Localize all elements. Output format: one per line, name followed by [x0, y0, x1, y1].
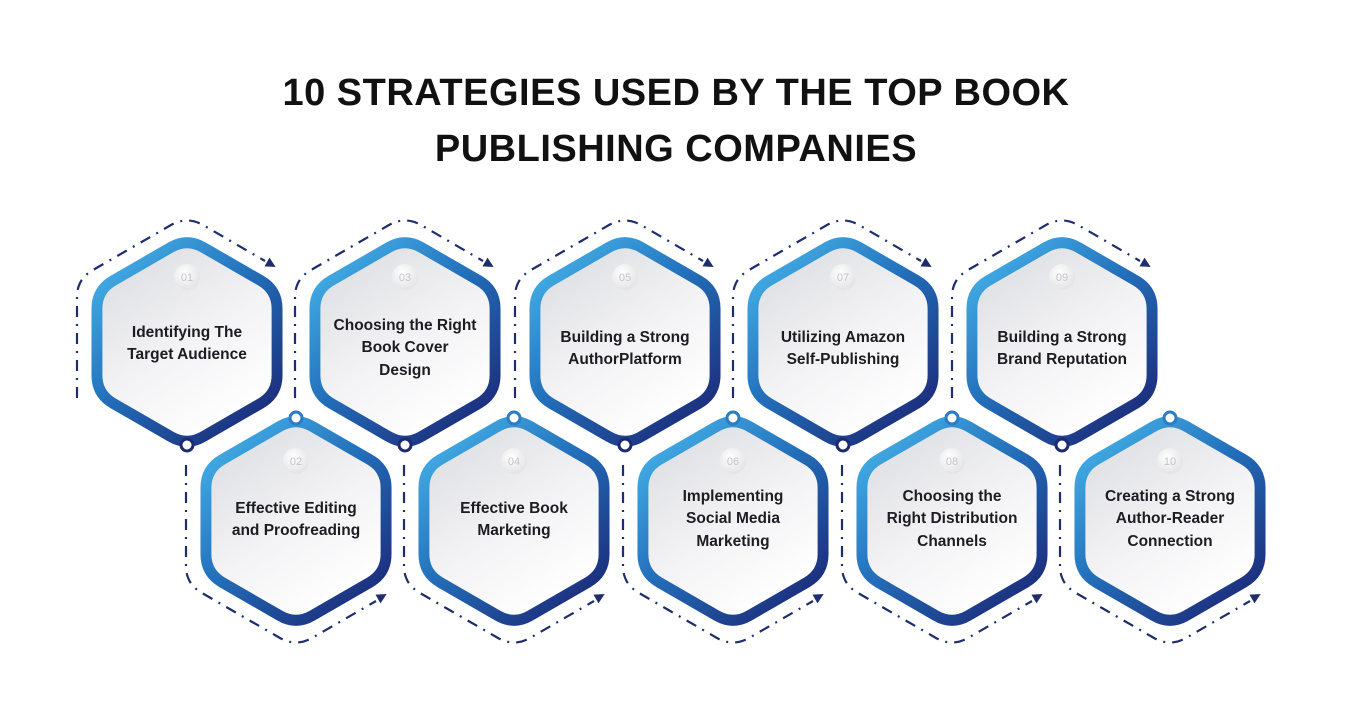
hexagon 02: 02	[290, 456, 302, 468]
hexagon 03	[295, 220, 496, 451]
hexagon 01	[77, 220, 278, 451]
hexagon 05	[515, 220, 716, 451]
hexagon 08: 08	[946, 456, 958, 468]
hexagon 04: Effective Book	[460, 500, 568, 517]
hexagon 05: Building a Strong	[560, 329, 690, 346]
hexagon 09: Building a Strong	[997, 329, 1127, 346]
hexagon 04: Marketing	[477, 522, 551, 539]
hexagon 06: 06	[727, 456, 739, 468]
hexagon 09: Brand Reputation	[997, 351, 1127, 368]
hexagon 01: 01	[181, 272, 193, 284]
hexagon 07: 07	[837, 272, 849, 284]
title: PUBLISHING COMPANIES	[435, 128, 917, 170]
hexagon 10	[1060, 412, 1263, 642]
hexagon 09: 09	[1056, 272, 1068, 284]
hexagon 01: Target Audience	[127, 346, 247, 363]
hexagon 10: 10	[1164, 456, 1176, 468]
hexagon 05: AuthorPlatform	[568, 351, 682, 368]
hexagon 03: Book Cover	[362, 339, 448, 356]
hexagon 08: Right Distribution	[887, 510, 1017, 527]
hexagon 05: 05	[619, 272, 631, 284]
hexagon 06: Implementing	[683, 488, 783, 505]
hexagon 02: and Proofreading	[232, 522, 360, 539]
title	[282, 72, 1070, 170]
hexagon 06: Social Media	[686, 510, 780, 527]
hexagon 02	[186, 412, 389, 642]
hexagon 07	[733, 220, 934, 451]
hexagon 04: 04	[508, 456, 520, 468]
hexagon 07: Self-Publishing	[787, 351, 899, 368]
hexagon 08: Channels	[917, 533, 987, 550]
hexagon 01: Identifying The	[132, 324, 242, 341]
hexagon 04	[404, 412, 607, 642]
hexagon 10: Connection	[1127, 533, 1213, 550]
hexagon 08	[842, 412, 1045, 642]
hexagon 10: Creating a Strong	[1105, 488, 1235, 505]
hexagon 06: Marketing	[696, 533, 770, 550]
hexagon 03: Choosing the Right	[334, 317, 476, 334]
hexagon 03: Design	[379, 362, 431, 379]
hexagon 02: Effective Editing	[235, 500, 357, 517]
hexagon 03: 03	[399, 272, 411, 284]
hexagon 09	[952, 220, 1153, 451]
title: 10 STRATEGIES USED BY THE TOP BOOK	[282, 72, 1070, 114]
hexagon 10: Author-Reader	[1116, 510, 1224, 527]
hexagon 07: Utilizing Amazon	[781, 329, 905, 346]
hexagon 06	[623, 412, 826, 642]
hexagon 08: Choosing the	[902, 488, 1002, 505]
